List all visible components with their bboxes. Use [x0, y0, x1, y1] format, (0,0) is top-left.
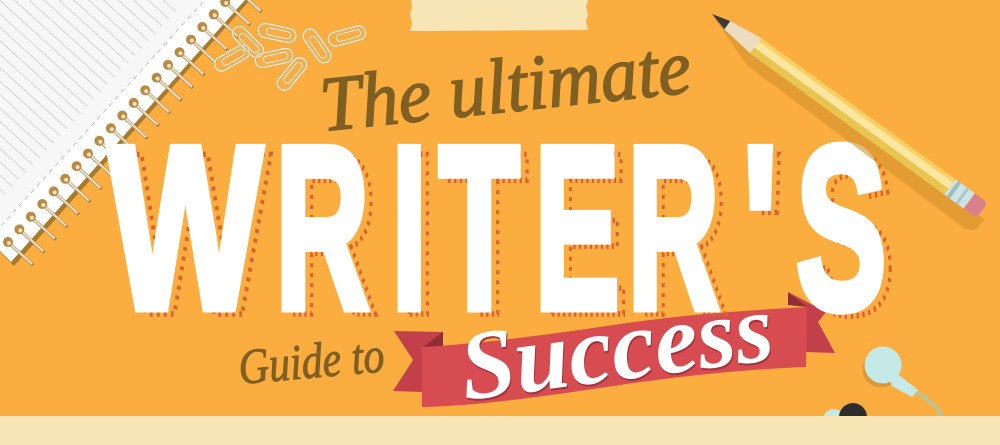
dotted letter outline: T — [448, 105, 529, 364]
pencil wood — [722, 17, 761, 53]
spiral rings — [3, 0, 262, 265]
heading: WRITER'S: R — [628, 98, 719, 358]
dotted letter outline: ' — [752, 106, 787, 364]
text: Success: Success — [454, 274, 779, 422]
bottom cream strip — [0, 416, 1000, 445]
ruled lines — [0, 0, 176, 194]
earbud head — [864, 346, 902, 384]
perforation line — [2, 2, 203, 225]
text: Guide to: Guide to — [236, 326, 386, 395]
pencil ferrule — [944, 179, 975, 209]
notebook shadow — [0, 0, 250, 266]
icon: earbuds — [823, 346, 944, 431]
ribbon band — [422, 307, 807, 407]
heading: WRITER'S: T — [439, 99, 520, 358]
heading: WRITER'S: W — [109, 99, 262, 358]
pencil body — [759, 38, 955, 182]
tape at top — [410, 0, 588, 31]
dotted letter outline: I — [400, 105, 436, 364]
ruled paper area — [0, 0, 203, 226]
icon: pencil — [697, 6, 993, 235]
earbud cable — [914, 391, 944, 418]
dotted letter outline: S — [805, 105, 896, 364]
heading: The ultimate: The ultimate — [316, 22, 695, 148]
heading: WRITER'S: I — [392, 99, 427, 358]
heading: WRITER'S: S — [796, 99, 887, 358]
heading: WRITER'S: ' — [742, 100, 778, 358]
icon: paperclips — [212, 22, 367, 93]
heading: WRITER'S: E — [534, 99, 620, 358]
pencil shadow — [701, 16, 988, 235]
dotted letter outline: W — [118, 105, 271, 364]
heading: WRITER'S: R — [275, 98, 369, 357]
icon: spiral notebook — [0, 0, 262, 266]
earbud stem — [891, 372, 918, 397]
pencil eraser — [964, 193, 988, 218]
dotted letter outline: R — [284, 104, 378, 363]
second earbud — [823, 409, 845, 431]
dotted letter outline: R — [636, 104, 728, 364]
pencil tip — [709, 10, 730, 29]
ribbon tails — [393, 292, 835, 392]
notebook page — [0, 0, 245, 262]
earbud shadow — [862, 350, 900, 388]
dotted letter outline — [118, 104, 896, 364]
dotted letter outline: E — [544, 105, 629, 364]
text: Success: Success — [455, 276, 780, 424]
heading: WRITER'S — [109, 98, 887, 358]
